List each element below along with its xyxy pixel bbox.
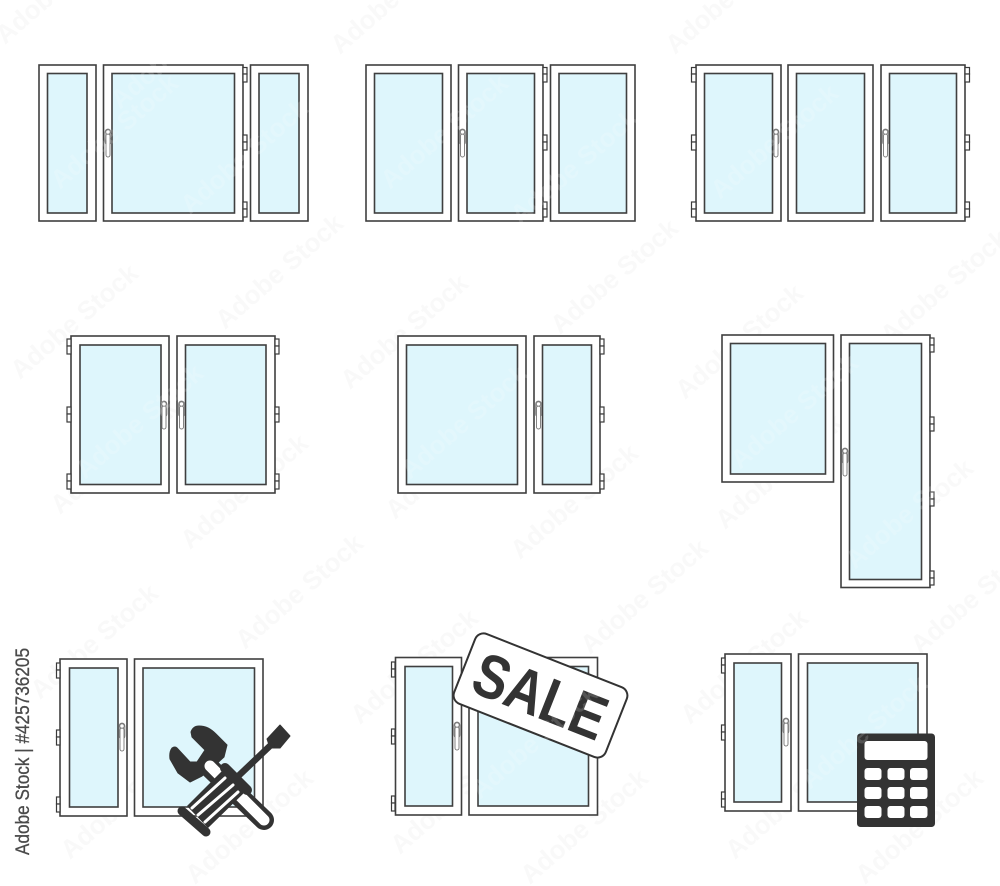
icon: calculator — [857, 734, 935, 827]
watermark: background: Adobe Stock — [514, 762, 654, 886]
watermark: over glass: Adobe Stock — [724, 347, 864, 475]
watermark: background: Adobe Stock — [719, 737, 859, 865]
watermark: background: Adobe Stock — [384, 732, 524, 860]
watermark: background: Adobe Stock — [344, 602, 484, 730]
watermark: over glass: Adobe Stock — [174, 92, 314, 220]
window: sale — [392, 658, 598, 815]
watermark: over glass: Adobe Stock — [464, 677, 604, 805]
watermark: background: Adobe Stock — [229, 527, 369, 655]
icon: screwdriver — [182, 725, 290, 832]
watermark: over glass: Adobe Stock — [44, 67, 184, 195]
watermark: background: Adobe Stock — [209, 207, 349, 335]
watermark: over glass: Adobe Stock — [839, 447, 979, 575]
watermark: background: Adobe Stock — [544, 212, 684, 340]
window: three equal panes, middle opening — [366, 65, 635, 221]
watermark: background: Adobe Stock — [574, 532, 714, 660]
watermark: over glass: Adobe Stock — [504, 102, 644, 230]
watermark: over glass: Adobe Stock — [69, 357, 209, 485]
watermark: background: Adobe Stock — [4, 257, 144, 385]
stock id text: Adobe Stock | #425736205 — [13, 648, 34, 855]
watermark: background: Adobe Stock — [504, 437, 644, 565]
window: repair — [56, 659, 263, 816]
window: double casement — [67, 336, 279, 493]
callout: sale sign: SALE — [463, 640, 617, 754]
watermark: over glass: Adobe Stock — [704, 77, 844, 205]
watermark: over glass: Adobe Stock — [394, 357, 534, 485]
watermark: background: Adobe Stock — [849, 762, 989, 886]
watermark: background: Adobe Stock — [379, 397, 519, 525]
watermark: background: Adobe Stock — [44, 392, 184, 520]
watermark: background: Adobe Stock — [839, 452, 979, 580]
watermark: background: Adobe Stock — [179, 762, 319, 886]
window: wide fixed and narrow opening — [398, 336, 604, 493]
window: three equal panes, outer opening — [692, 65, 970, 221]
window: calculation — [722, 654, 927, 811]
watermark: background: Adobe Stock — [54, 737, 194, 865]
watermark: background: Adobe Stock — [174, 427, 314, 555]
watermark: background: Adobe Stock — [24, 577, 164, 705]
watermark: background: Adobe Stock — [334, 267, 474, 395]
watermark: over glass: Adobe Stock — [374, 67, 514, 195]
watermark: background: Adobe Stock — [669, 277, 809, 405]
window: balcony door with window — [722, 335, 934, 588]
window: narrow, wide, narrow — [39, 65, 308, 221]
watermark: over glass: Adobe — [104, 39, 185, 115]
watermark: over glass: Adobe Stock — [794, 667, 934, 795]
watermark: background: Adobe Stock — [709, 407, 849, 535]
icon: wrench — [170, 726, 264, 820]
icon: wrench and screwdriver — [170, 725, 290, 832]
watermark: background: Adobe Stock — [674, 602, 814, 730]
